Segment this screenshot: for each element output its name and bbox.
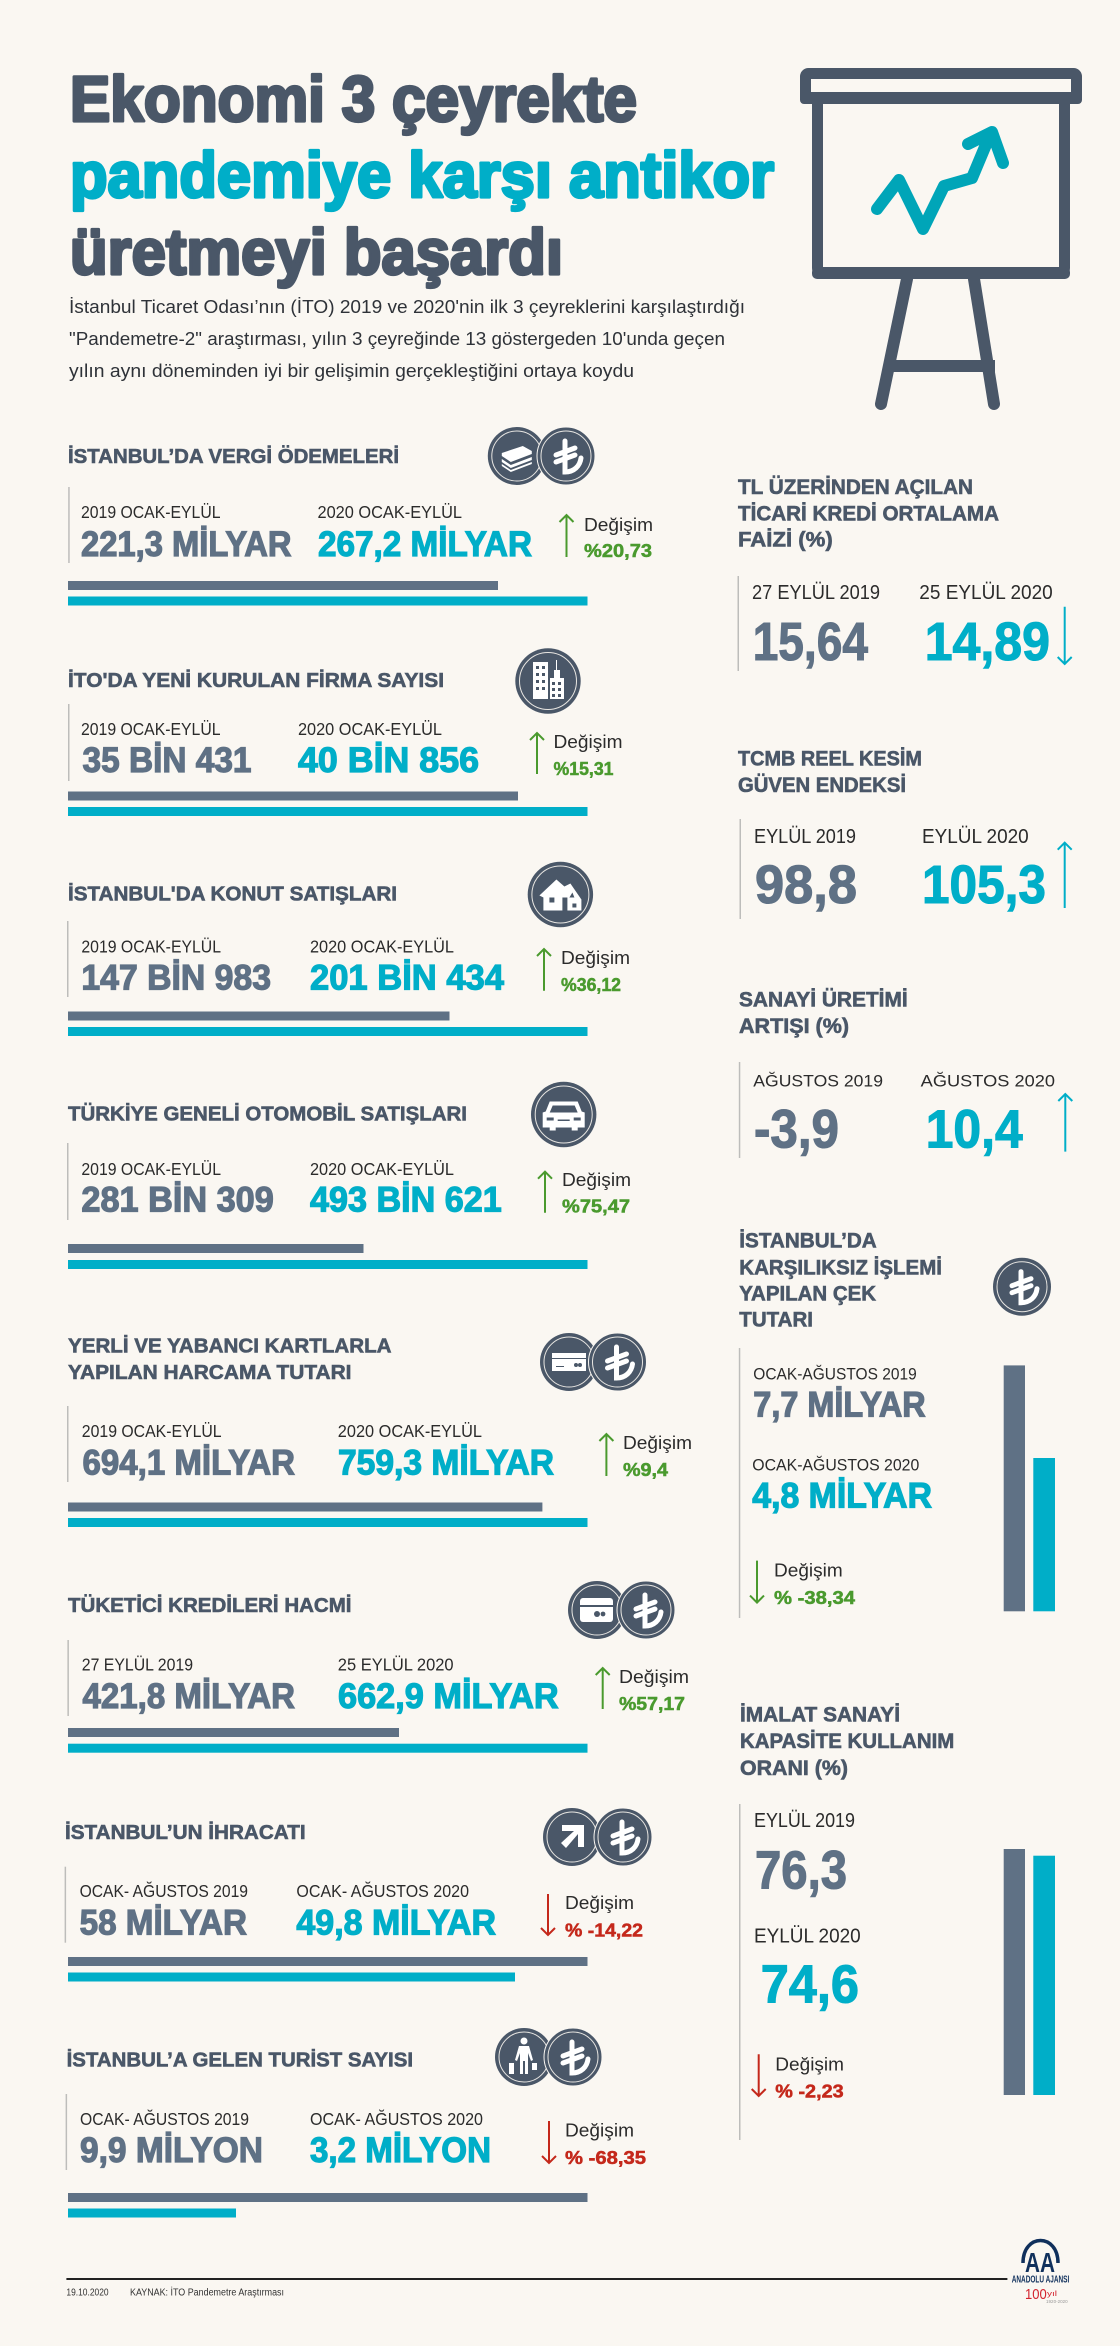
- panel: karşılıksız işlemi yapılan çek tutarı: 4,8 MİLYAR: [752, 1476, 932, 1515]
- icon: credit card and lira coins: [568, 1581, 675, 1639]
- logo: Anadolu Ajansı: ANADOLU AJANSI: [1012, 2274, 1069, 2286]
- title: üretmeyi başardı: [70, 216, 563, 288]
- panel: sanayi üretimi artışı: AĞUSTOS 2020: [921, 1072, 1055, 1091]
- panel: İstanbul'a gelen turist sayısı: Değişim: [565, 2121, 634, 2141]
- panel: İTO'da yeni kurulan firma sayısı: 35 BİN 431: [82, 741, 252, 780]
- bar chart: çek tutarı: [1004, 1365, 1055, 1611]
- icon: bank card and lira coins: [540, 1333, 646, 1391]
- panel: karşılıksız işlemi yapılan çek tutarı: OCAK-AĞUSTOS 2020: [752, 1455, 919, 1474]
- panel: imalat sanayi kapasite kullanım oranı: ORANI (%): [740, 1757, 848, 1780]
- panel: İstanbul'da vergi ödemeleri: 2020 OCAK-EYLÜL: [318, 502, 462, 522]
- panel: imalat sanayi kapasite kullanım oranı: 76,3: [755, 1840, 847, 1900]
- logo: Anadolu Ajansı: 1920-2020: [1046, 2299, 1068, 2304]
- panel: İstanbul'da vergi ödemeleri: Değişim: [584, 515, 653, 535]
- icon: export arrow and lira coins: [543, 1808, 652, 1866]
- panel: tüketici kredileri hacmi: 25 EYLÜL 2020: [338, 1655, 454, 1675]
- icon: lira coin: [993, 1258, 1051, 1316]
- panel: İstanbul'da vergi ödemeleri: İSTANBUL’DA VERGİ ÖDEMELERİ: [68, 445, 399, 468]
- panel: İstanbul'da vergi ödemeleri: 2019 OCAK-EYLÜL: [81, 502, 221, 522]
- panel: yerli ve yabancı kartlarla yapılan harcama tutarı: 759,3 MİLYAR: [338, 1444, 554, 1483]
- panel: TL üzerinden açılan ticari kredi ortalama faizi: FAİZİ (%): [738, 529, 833, 552]
- panel: TL üzerinden açılan ticari kredi ortalama faizi: [738, 476, 1072, 672]
- logo: Anadolu Ajansı: AA: [1025, 2247, 1055, 2278]
- panel: tüketici kredileri hacmi: 27 EYLÜL 2019: [82, 1655, 193, 1675]
- panel: imalat sanayi kapasite kullanım oranı: KAPASİTE KULLANIM: [740, 1730, 954, 1753]
- panel: İstanbul'da vergi ödemeleri: %20,73: [584, 541, 652, 561]
- icon: money and lira coins: [488, 427, 595, 485]
- panel: sanayi üretimi artışı: ARTIŞI (%): [739, 1015, 849, 1038]
- footer: date and source: 19.10.2020: [66, 2288, 109, 2299]
- panel: TL üzerinden açılan ticari kredi ortalama faizi: 25 EYLÜL 2020: [919, 582, 1053, 604]
- panel: İstanbul'a gelen turist sayısı: [66, 2028, 646, 2218]
- panel: yerli ve yabancı kartlarla yapılan harcama tutarı: [67, 1333, 692, 1527]
- icon: houses: [528, 862, 593, 927]
- panel: imalat sanayi kapasite kullanım oranı: % -2,23: [775, 2082, 844, 2102]
- panel: İstanbul'da vergi ödemeleri: 267,2 MİLYAR: [318, 525, 532, 564]
- panel: Türkiye geneli otomobil satışları: Değişim: [562, 1170, 631, 1190]
- panel: yerli ve yabancı kartlarla yapılan harcama tutarı: YERLİ VE YABANCI KARTLARLA: [68, 1335, 392, 1358]
- intro paragraph: İstanbul Ticaret Odası’nın (İTO) 2019 ve 2020'nin ilk 3 çeyreklerini karşılaştırdığı: [69, 297, 745, 317]
- panel: yerli ve yabancı kartlarla yapılan harcama tutarı: Değişim: [623, 1433, 692, 1453]
- panel: sanayi üretimi artışı: AĞUSTOS 2019: [753, 1072, 883, 1091]
- panel: Türkiye geneli otomobil satışları: 2020 OCAK-EYLÜL: [310, 1159, 454, 1179]
- panel: imalat sanayi kapasite kullanım oranı: Değişim: [775, 2055, 844, 2075]
- panel: sanayi üretimi artışı: SANAYİ ÜRETİMİ: [739, 988, 908, 1011]
- intro paragraph: "Pandemetre-2" araştırması, yılın 3 çeyreğinde 13 göstergeden 10'unda geçen: [69, 329, 725, 349]
- panel: İTO'da yeni kurulan firma sayısı: 2020 OCAK-EYLÜL: [298, 719, 442, 739]
- panel: İstanbul'da konut satışları: İSTANBUL'DA KONUT SATIŞLARI: [68, 883, 397, 906]
- panel: TCMB reel kesim güven endeksi: EYLÜL 2019: [754, 826, 856, 848]
- panel: Türkiye geneli otomobil satışları: 493 BİN 621: [310, 1181, 502, 1220]
- panel: İstanbul'un ihracatı: İSTANBUL’UN İHRACATI: [65, 1821, 306, 1844]
- panel: karşılıksız işlemi yapılan çek tutarı: OCAK-AĞUSTOS 2019: [753, 1364, 917, 1383]
- icon: presentation board with rising arrow: [800, 74, 1082, 404]
- panel: yerli ve yabancı kartlarla yapılan harcama tutarı: %9,4: [623, 1460, 668, 1480]
- panel: İTO'da yeni kurulan firma sayısı: %15,31: [554, 759, 614, 779]
- panel: İstanbul'da konut satışları: 147 BİN 983: [81, 959, 271, 998]
- panel: TCMB reel kesim güven endeksi: TCMB REEL KESİM: [738, 748, 922, 771]
- panel: imalat sanayi kapasite kullanım oranı: [739, 1704, 1055, 2140]
- logo: Anadolu Ajansı: 100: [1025, 2286, 1047, 2303]
- panel: karşılıksız işlemi yapılan çek tutarı: YAPILAN ÇEK: [739, 1282, 876, 1305]
- panel: karşılıksız işlemi yapılan çek tutarı: [739, 1230, 1055, 1618]
- panel: TL üzerinden açılan ticari kredi ortalama faizi: 15,64: [753, 612, 868, 672]
- panel: İstanbul'da vergi ödemeleri: 221,3 MİLYAR: [81, 525, 292, 564]
- panel: İstanbul'un ihracatı: Değişim: [565, 1893, 634, 1913]
- panel: İstanbul'a gelen turist sayısı: % -68,35: [565, 2148, 646, 2168]
- panel: İTO'da yeni kurulan firma sayısı: 40 BİN 856: [298, 741, 479, 780]
- panel: TCMB reel kesim güven endeksi: [738, 748, 1072, 919]
- panel: Türkiye geneli otomobil satışları: 2019 OCAK-EYLÜL: [81, 1159, 221, 1179]
- panel: sanayi üretimi artışı: [739, 988, 1072, 1159]
- panel: karşılıksız işlemi yapılan çek tutarı: Değişim: [774, 1561, 843, 1581]
- panel: İstanbul'a gelen turist sayısı: OCAK- AĞUSTOS 2019: [80, 2108, 249, 2129]
- icon: car: [531, 1082, 596, 1147]
- panel: İstanbul'da konut satışları: 2020 OCAK-EYLÜL: [310, 937, 454, 957]
- panel: İTO'da yeni kurulan firma sayısı: 2019 OCAK-EYLÜL: [81, 719, 221, 739]
- footer: date and source: KAYNAK: İTO Pandemetre Araştırması: [130, 2286, 284, 2299]
- logo: Anadolu Ajansı: yıl: [1047, 2291, 1058, 2298]
- panel: karşılıksız işlemi yapılan çek tutarı: % -38,34: [774, 1588, 855, 1608]
- panel: İTO'da yeni kurulan firma sayısı: Değişim: [554, 732, 622, 752]
- icon: tourist and lira coins: [495, 2028, 602, 2086]
- panel: imalat sanayi kapasite kullanım oranı: EYLÜL 2019: [754, 1810, 855, 1832]
- title: Ekonomi 3 çeyrekte: [70, 63, 637, 135]
- panel: karşılıksız işlemi yapılan çek tutarı: TUTARI: [739, 1308, 813, 1331]
- panel: İstanbul'da konut satışları: 2019 OCAK-EYLÜL: [81, 937, 221, 957]
- panel: yerli ve yabancı kartlarla yapılan harcama tutarı: 2019 OCAK-EYLÜL: [82, 1421, 222, 1441]
- panel: TL üzerinden açılan ticari kredi ortalama faizi: 14,89: [925, 612, 1050, 672]
- intro paragraph: [69, 297, 745, 381]
- panel: sanayi üretimi artışı: 10,4: [926, 1099, 1023, 1159]
- panel: İstanbul'a gelen turist sayısı: OCAK- AĞUSTOS 2020: [310, 2108, 483, 2129]
- panel: tüketici kredileri hacmi: %57,17: [619, 1694, 685, 1714]
- panel: imalat sanayi kapasite kullanım oranı: EYLÜL 2020: [754, 1925, 861, 1947]
- panel: TCMB reel kesim güven endeksi: 105,3: [922, 855, 1046, 915]
- panel: TL üzerinden açılan ticari kredi ortalama faizi: TİCARİ KREDİ ORTALAMA: [738, 503, 999, 526]
- footer: date and source: [66, 2278, 1007, 2299]
- panel: İstanbul'un ihracatı: OCAK- AĞUSTOS 2020: [296, 1880, 469, 1901]
- panel: Türkiye geneli otomobil satışları: 281 BİN 309: [81, 1181, 274, 1220]
- panel: İstanbul'a gelen turist sayısı: 9,9 MİLYON: [80, 2131, 263, 2170]
- panel: İstanbul'da konut satışları: %36,12: [561, 975, 621, 995]
- panel: imalat sanayi kapasite kullanım oranı: 74,6: [761, 1955, 859, 2015]
- panel: İstanbul'a gelen turist sayısı: 3,2 MİLYON: [310, 2131, 491, 2170]
- panel: tüketici kredileri hacmi: Değişim: [619, 1667, 689, 1687]
- panel: karşılıksız işlemi yapılan çek tutarı: 7,7 MİLYAR: [753, 1386, 926, 1425]
- panel: TL üzerinden açılan ticari kredi ortalama faizi: 27 EYLÜL 2019: [752, 582, 880, 604]
- panel: tüketici kredileri hacmi: 421,8 MİLYAR: [82, 1677, 295, 1716]
- panel: Türkiye geneli otomobil satışları: TÜRKİYE GENELİ OTOMOBİL SATIŞLARI: [68, 1103, 467, 1126]
- panel: TCMB reel kesim güven endeksi: EYLÜL 2020: [922, 826, 1029, 848]
- panel: Türkiye geneli otomobil satışları: %75,47: [562, 1197, 630, 1217]
- panel: sanayi üretimi artışı: -3,9: [754, 1099, 839, 1159]
- panel: tüketici kredileri hacmi: 662,9 MİLYAR: [338, 1677, 559, 1716]
- panel: karşılıksız işlemi yapılan çek tutarı: KARŞILIKSIZ İŞLEMİ: [739, 1256, 942, 1279]
- panel: yerli ve yabancı kartlarla yapılan harcama tutarı: 2020 OCAK-EYLÜL: [338, 1421, 482, 1441]
- panel: İstanbul'da konut satışları: [67, 862, 630, 1036]
- panel: İTO'da yeni kurulan firma sayısı: [68, 648, 622, 816]
- panel: İstanbul'un ihracatı: 58 MİLYAR: [80, 1904, 247, 1943]
- panel: İstanbul'da vergi ödemeleri: [68, 427, 653, 606]
- panel: İstanbul'un ihracatı: 49,8 MİLYAR: [296, 1904, 496, 1943]
- panel: yerli ve yabancı kartlarla yapılan harcama tutarı: 694,1 MİLYAR: [82, 1444, 295, 1483]
- panel: İstanbul'da konut satışları: Değişim: [561, 948, 630, 968]
- bar chart: kapasite kullanım: [1004, 1849, 1055, 2095]
- panel: TCMB reel kesim güven endeksi: GÜVEN ENDEKSİ: [738, 774, 906, 797]
- panel: imalat sanayi kapasite kullanım oranı: İMALAT SANAYİ: [740, 1704, 900, 1727]
- title: [70, 63, 774, 288]
- panel: yerli ve yabancı kartlarla yapılan harcama tutarı: YAPILAN HARCAMA TUTARI: [68, 1362, 352, 1384]
- logo: Anadolu Ajansı: [1012, 2240, 1069, 2304]
- panel: TL üzerinden açılan ticari kredi ortalama faizi: TL ÜZERİNDEN AÇILAN: [738, 476, 973, 499]
- panel: TCMB reel kesim güven endeksi: 98,8: [755, 855, 857, 915]
- intro paragraph: yılın aynı döneminden iyi bir gelişimin gerçekleştiğini ortaya koydu: [69, 361, 634, 381]
- panel: tüketici kredileri hacmi: [67, 1581, 689, 1753]
- icon: buildings: [515, 648, 581, 714]
- title: pandemiye karşı antikor: [70, 139, 774, 211]
- panel: karşılıksız işlemi yapılan çek tutarı: İSTANBUL’DA: [739, 1230, 877, 1252]
- panel: İstanbul'un ihracatı: OCAK- AĞUSTOS 2019: [80, 1880, 248, 1901]
- panel: İstanbul'da konut satışları: 201 BİN 434: [310, 959, 505, 998]
- panel: İstanbul'a gelen turist sayısı: İSTANBUL’A GELEN TURİST SAYISI: [67, 2049, 413, 2072]
- panel: Türkiye geneli otomobil satışları: [67, 1082, 631, 1269]
- panel: İstanbul'un ihracatı: [65, 1808, 652, 1982]
- panel: İstanbul'un ihracatı: % -14,22: [565, 1921, 643, 1941]
- panel: İTO'da yeni kurulan firma sayısı: İTO'DA YENİ KURULAN FİRMA SAYISI: [68, 669, 444, 692]
- panel: tüketici kredileri hacmi: TÜKETİCİ KREDİLERİ HACMİ: [68, 1594, 352, 1617]
